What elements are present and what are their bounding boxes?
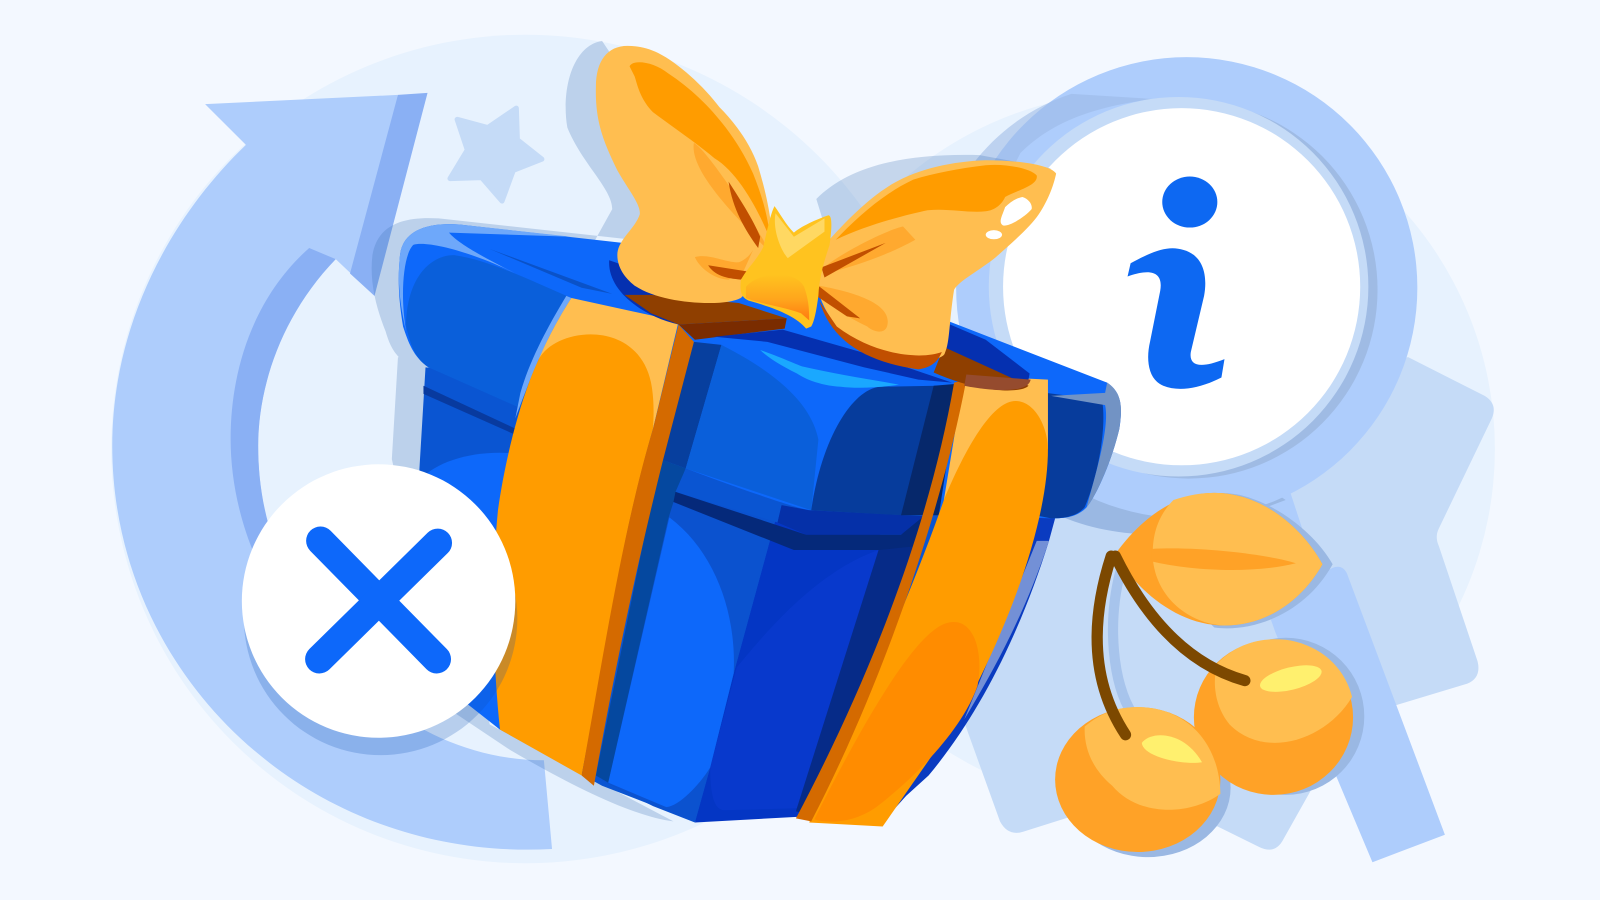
gift box — [399, 224, 1121, 827]
cherries — [1055, 493, 1364, 857]
knot highlight — [775, 213, 824, 258]
right side edge strip — [964, 541, 1049, 719]
ribbon body — [494, 334, 654, 776]
front left panel — [602, 480, 780, 822]
ribbon blue edge — [515, 296, 571, 418]
lid right edge tint — [1051, 383, 1121, 507]
bow knot — [740, 206, 831, 329]
icon: star — [450, 108, 542, 201]
band right piece — [778, 505, 928, 535]
lid — [399, 224, 1121, 518]
badge white face — [1003, 108, 1360, 465]
leaf light side — [1153, 493, 1322, 626]
lid rim highlight — [399, 224, 571, 332]
ribbon dark strip — [796, 380, 966, 821]
lid front column — [686, 345, 818, 510]
bow bottom band — [819, 301, 942, 369]
knot orange fold — [746, 274, 809, 320]
right ribbon — [796, 376, 1048, 827]
all shadow shapes — [372, 41, 1051, 821]
front panel bright facet — [710, 550, 879, 810]
background circle: left — [111, 35, 940, 863]
front panel dark column — [796, 541, 923, 814]
close face — [242, 464, 515, 738]
cross stroke two — [319, 543, 438, 659]
cherry one — [1055, 707, 1220, 852]
cross stroke one — [320, 541, 437, 659]
shadow on right ribbon — [934, 347, 1029, 390]
arrow head shade — [350, 93, 428, 296]
bow left fold — [729, 182, 760, 248]
icon: cross — [319, 541, 438, 659]
cherry one light — [1085, 707, 1220, 810]
info badge — [956, 57, 1417, 535]
badge left shade — [967, 94, 1153, 204]
body left dark line — [423, 386, 515, 435]
bow — [596, 46, 1056, 369]
arrow body — [112, 95, 552, 850]
leaf shadow — [1128, 493, 1333, 628]
icon: info letter — [1128, 177, 1224, 389]
lid band shadow — [673, 492, 923, 550]
info stem — [1128, 248, 1224, 389]
bow right lower fold — [816, 286, 860, 318]
bow left lower patch — [695, 250, 753, 280]
rosette badge back — [954, 357, 1494, 862]
shadow on left ribbon — [624, 295, 787, 324]
bow left loop — [596, 46, 786, 303]
cherry two shadow — [1207, 638, 1364, 795]
bow highlight small — [986, 230, 1002, 239]
ribbon tail — [1224, 488, 1445, 862]
bow highlight large — [1001, 197, 1032, 226]
leaf — [1115, 493, 1322, 626]
cherry two glint — [1257, 660, 1324, 697]
lid cyan highlight — [760, 350, 899, 388]
lid front left column — [660, 342, 721, 468]
bow right loop — [801, 160, 1056, 361]
bow left patch — [694, 143, 767, 250]
bow right patch — [827, 227, 915, 273]
shadow on lid centre — [714, 330, 952, 383]
cherry one glint — [1142, 735, 1202, 763]
shadow on lid right — [942, 324, 1030, 385]
stem right — [1115, 556, 1245, 681]
shadow end — [964, 374, 1031, 390]
ribbon light top — [539, 298, 679, 429]
lid right face — [811, 386, 937, 515]
bow left lower fold — [708, 265, 747, 280]
bow right inner — [836, 165, 1037, 240]
bow shadow — [609, 260, 1031, 390]
front bright column — [608, 517, 734, 807]
bow right fold — [821, 243, 886, 278]
circular arrow — [112, 93, 552, 850]
body dark column — [596, 459, 686, 783]
front right panel — [695, 505, 918, 822]
rosette burst — [954, 357, 1494, 850]
badge shadow — [1031, 459, 1286, 535]
close badge — [242, 464, 517, 755]
stem left shadow — [1113, 571, 1133, 714]
arrow inner shade — [231, 248, 336, 556]
body left bright area — [420, 453, 520, 730]
lid right dark column — [901, 384, 959, 515]
shadow on lid left — [609, 260, 714, 324]
stem left — [1097, 556, 1126, 735]
badge inner shade — [1000, 101, 1378, 479]
shadow on ribbon darker — [679, 318, 787, 340]
right side dark strip — [888, 515, 1055, 816]
lid right side — [1036, 393, 1103, 518]
info dot — [1162, 177, 1217, 228]
left ribbon — [494, 298, 694, 786]
lid left shade — [406, 255, 571, 418]
background circle: right — [781, 92, 1495, 806]
badge outer ring — [956, 57, 1417, 518]
badge inner light ring — [989, 97, 1368, 477]
box body base — [419, 367, 1037, 821]
band left piece — [676, 468, 782, 522]
ribbon light top — [944, 376, 1048, 500]
cherry two light — [1215, 639, 1352, 743]
bow right lower patch — [819, 286, 888, 332]
ribbon dark strip — [582, 324, 694, 786]
cherry two — [1194, 640, 1353, 795]
bow left inner — [630, 62, 770, 240]
lid top sliver — [490, 249, 612, 294]
ribbon shaded patch — [814, 622, 979, 822]
cherry one shadow — [1065, 718, 1231, 857]
close shadow — [244, 482, 517, 755]
gift shadow — [372, 41, 1051, 821]
ribbon body — [809, 401, 1048, 827]
leaf vein — [1151, 548, 1296, 570]
